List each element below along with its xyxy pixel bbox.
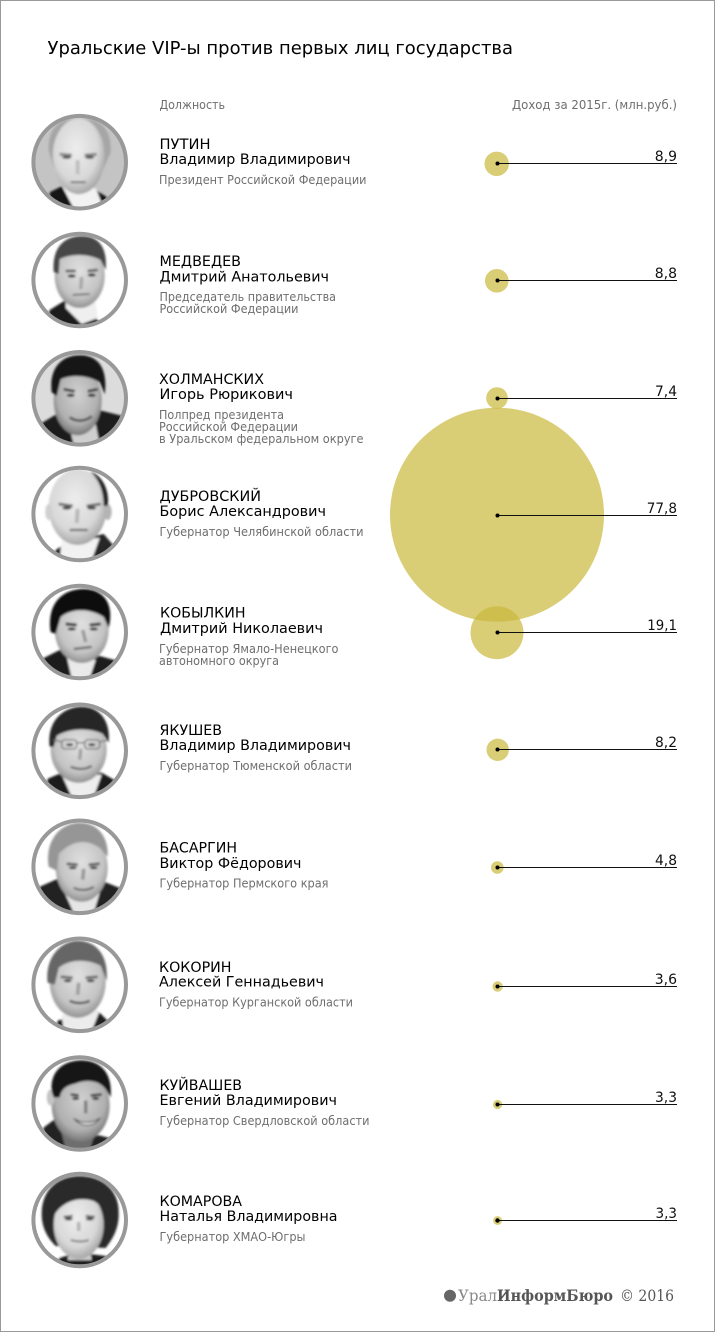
position [160, 290, 336, 316]
copyright: © 2016 [620, 1286, 674, 1305]
bubble: Якушев 8,2 [486, 739, 509, 761]
position: Президент Российской Федерации [159, 173, 366, 187]
name: КОКОРИН [159, 960, 232, 976]
row: Якушев [33, 704, 677, 797]
position: Губернатор Свердловской области [160, 1114, 370, 1128]
title: Уральские VIP-ы против первых лиц государства [48, 38, 513, 59]
bubble: Куйвашев 3,3 [493, 1100, 502, 1109]
name [160, 487, 326, 520]
name: Наталья Владимировна [160, 1209, 338, 1225]
name: Игорь Рюрикович [160, 387, 293, 403]
leader line and value: 19,1 [647, 618, 677, 634]
leader line and value [496, 972, 677, 988]
position: Губернатор ХМАО-Югры [160, 1230, 306, 1244]
ring [33, 116, 126, 208]
name: ПУТИН [160, 137, 210, 153]
leader line and value: 8,2 [655, 735, 677, 751]
name [160, 841, 302, 872]
leader line and value: 8,9 [655, 149, 677, 165]
ring [33, 352, 126, 445]
leader line and value: 3,3 [656, 1206, 677, 1222]
position [159, 642, 338, 668]
leader line and value [496, 1090, 677, 1106]
row: Дубровский [33, 468, 677, 560]
name: КУЙВАШЕВ [160, 1076, 242, 1094]
position: Председатель правительства [160, 290, 336, 304]
bubble: Дубровский 77,8 [390, 408, 604, 622]
name [160, 1076, 337, 1109]
name: ДУБРОВСКИЙ [160, 487, 261, 505]
name [160, 606, 323, 637]
ring [33, 1174, 126, 1266]
leader line and value: 77,8 [647, 501, 677, 517]
portrait: Басаргин [40, 822, 120, 911]
row: Комарова [33, 1174, 677, 1266]
column heading: income: Доход за 2015г. (млн.руб.) [512, 98, 677, 112]
ring [33, 586, 126, 678]
footer: logo and copyright [444, 1286, 674, 1305]
name [160, 723, 351, 754]
portrait: Медведев [48, 236, 108, 324]
row: Медведев [33, 234, 677, 326]
bubble: Холманских 7,4 [486, 387, 508, 409]
portrait: Куйвашев [42, 1059, 113, 1148]
position: Губернатор Тюменской области [160, 759, 352, 773]
name [160, 254, 329, 286]
leader line and value [495, 1206, 677, 1223]
name [160, 1194, 338, 1225]
leader line and value [496, 735, 677, 752]
leader line and value [496, 618, 677, 634]
portrait: Комарова [40, 1176, 120, 1264]
name: Алексей Геннадьевич [159, 975, 324, 991]
row: Кокорин [33, 938, 677, 1031]
name: Дмитрий Анатольевич [160, 270, 329, 286]
ring [33, 468, 126, 560]
portrait: Дубровский [44, 470, 114, 558]
position: Губернатор Ямало-Ненецкого [159, 642, 338, 656]
name: ЯКУШЕВ [160, 723, 222, 739]
position [159, 408, 364, 446]
position: Губернатор Челябинской области [160, 525, 364, 539]
logo text: Урал [458, 1286, 497, 1305]
row: Холманских [33, 352, 677, 446]
column heading: position: Должность [160, 98, 225, 112]
position: Полпред президента [159, 408, 284, 422]
leader line and value: 7,4 [655, 384, 677, 400]
name: Владимир Владимирович [160, 738, 351, 754]
row: Куйвашев [33, 1057, 677, 1150]
portrait: Холманских [34, 352, 126, 444]
ring [33, 938, 126, 1031]
leader line and value [496, 149, 677, 166]
leader line and value [496, 384, 677, 400]
bubble: Комарова 3,3 [493, 1216, 502, 1225]
portrait: Кобылкин [43, 588, 115, 676]
position: Российской Федерации [159, 420, 298, 434]
ring [33, 234, 126, 326]
leader line and value [496, 501, 677, 518]
name [159, 960, 324, 991]
position: Губернатор Пермского края [160, 877, 328, 891]
portrait: Кокорин [46, 940, 108, 1029]
leader line and value: 4,8 [655, 853, 677, 869]
name: Владимир Владимирович [160, 152, 350, 168]
name: МЕДВЕДЕВ [160, 254, 241, 270]
name: БАСАРГИН [160, 841, 237, 857]
bubble chart: income [390, 152, 604, 1225]
position: автономного округа [159, 654, 279, 668]
name [160, 137, 350, 168]
bubble: Кобылкин 19,1 [470, 606, 524, 659]
name: КОМАРОВА [160, 1194, 242, 1210]
bubble: Кокорин 3,6 [492, 981, 503, 992]
row: Басаргин [33, 820, 677, 913]
ring [33, 704, 126, 797]
leader line and value: 3,6 [655, 972, 677, 988]
position: в Уральском федеральном округе [159, 432, 364, 446]
leader line and value [496, 266, 677, 282]
leader line and value: 8,8 [655, 266, 677, 282]
portrait: Якушев [46, 706, 114, 795]
ring [33, 1057, 126, 1150]
bubble: Путин 8,9 [484, 152, 509, 176]
name: КОБЫЛКИН [160, 606, 246, 622]
logo text bold: ИнформБюро [497, 1286, 613, 1305]
ring [33, 820, 126, 913]
name: Виктор Фёдорович [160, 856, 302, 872]
name [159, 372, 293, 403]
portrait: Путин [34, 116, 126, 208]
name: Борис Александрович [160, 504, 326, 520]
name: Дмитрий Николаевич [160, 621, 323, 637]
leader line and value [496, 853, 677, 870]
row: Путин [33, 116, 677, 208]
position: Губернатор Курганской области [159, 996, 353, 1010]
name: ХОЛМАНСКИХ [159, 372, 264, 388]
row: Кобылкин [33, 586, 677, 678]
position: Российской Федерации [160, 302, 298, 316]
logo dot [444, 1290, 456, 1302]
bubble: Медведев 8,8 [485, 269, 509, 293]
name: Евгений Владимирович [160, 1093, 337, 1109]
bubble: Басаргин 4,8 [491, 861, 504, 874]
leader line and value: 3,3 [655, 1090, 677, 1106]
